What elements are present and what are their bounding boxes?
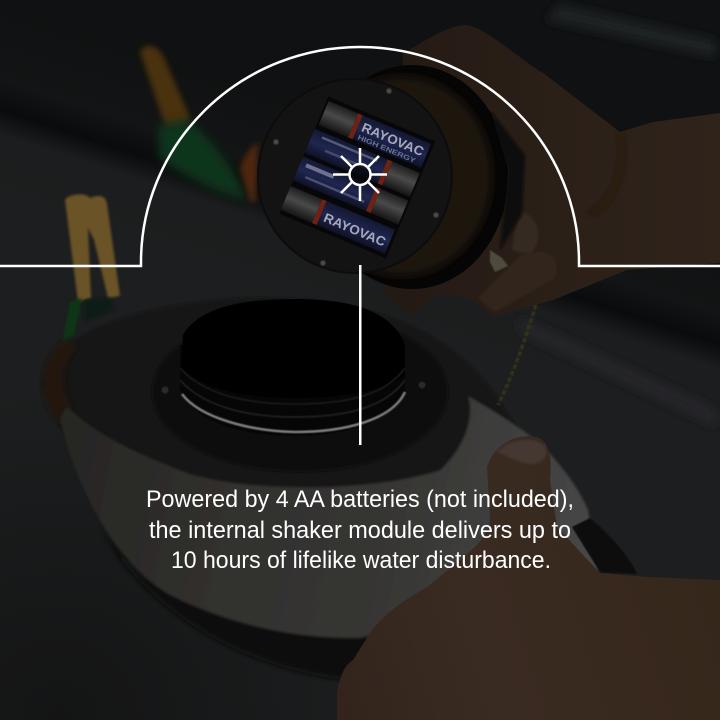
module front plate [257, 78, 453, 274]
fingers [512, 212, 538, 255]
black strip [572, 518, 637, 574]
photo: bait bucket bowl [42, 298, 637, 680]
battery 1: HIGH ENERGY [356, 134, 417, 165]
battery 4 [281, 186, 395, 254]
photo: rope lanyard [498, 298, 538, 405]
callout connector line [359, 265, 362, 445]
icon: sun / power burst [333, 148, 387, 201]
caption text: the internal shaker module delivers up to [149, 517, 571, 544]
thread rings [180, 368, 405, 432]
battery 4: RAYOVAC [321, 210, 389, 250]
photo: upper hand holding module [383, 25, 720, 317]
photo: lower hand and thumb [337, 436, 720, 720]
bowl dark foot [95, 520, 375, 680]
bolt detail [162, 386, 168, 394]
module back housing [316, 65, 508, 289]
screws [273, 88, 439, 266]
clasp [490, 250, 508, 272]
caption text [146, 486, 574, 574]
caption text: 10 hours of lifelike water disturbance. [171, 547, 551, 574]
battery 2 [305, 129, 420, 197]
thumbnail [497, 440, 546, 464]
yellow pliers handles [65, 194, 120, 302]
battery shaker module [257, 65, 525, 289]
bowl brown rim [44, 340, 78, 425]
neck opening [181, 299, 405, 398]
caption text: Powered by 4 AA batteries (not included), [146, 486, 574, 513]
knit fabric cover [60, 396, 600, 638]
inner ring plate [152, 312, 448, 472]
battery 1: RAYOVAC [359, 120, 427, 159]
semicircular outline callout frame [0, 47, 720, 266]
threaded neck [180, 345, 405, 436]
photo: background pliers and tools [62, 46, 258, 342]
bowl body [42, 298, 545, 600]
battery 1 [319, 101, 431, 168]
wrist crease [590, 132, 622, 213]
battery 3 [293, 156, 408, 225]
battery tray [279, 97, 435, 259]
rim knobs [490, 110, 525, 250]
